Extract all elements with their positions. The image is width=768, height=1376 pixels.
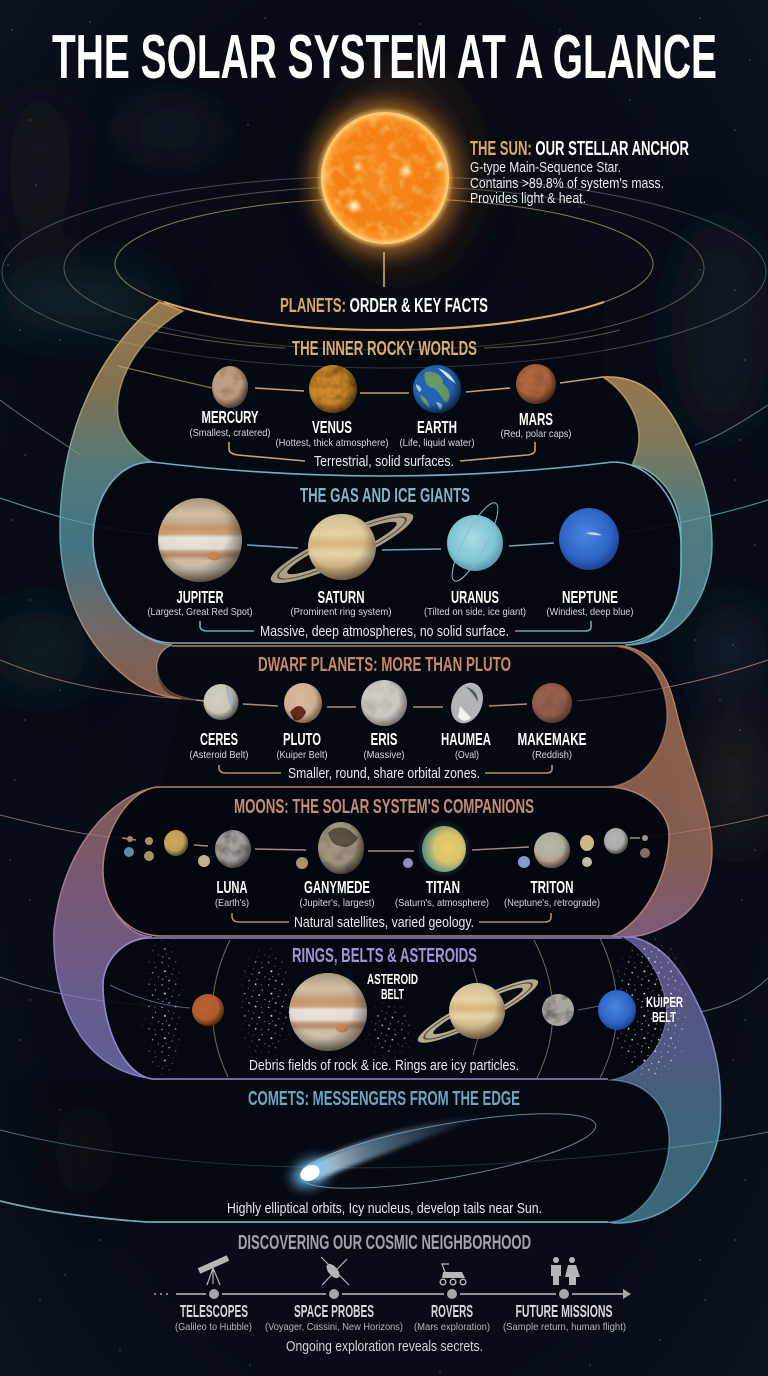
label: saturn: (Prominent ring system)	[290, 606, 392, 618]
planet: mercury	[212, 366, 248, 408]
planet: neptune	[559, 508, 619, 570]
label: mercury: MERCURY	[202, 407, 259, 427]
label: neptune: (Windiest, deep blue)	[546, 606, 634, 618]
label: kuiper belt: BELT	[652, 1009, 676, 1026]
label: haumea	[441, 729, 491, 761]
planet: mars	[192, 994, 224, 1026]
caption: moons: Natural satellites, varied geology.	[294, 915, 474, 931]
label: titan: (Saturn's, atmosphere)	[395, 897, 489, 909]
label: uranus	[424, 587, 526, 618]
caption: comets: Highly elliptical orbits, Icy nucleus, develop tails near Sun.	[227, 1201, 542, 1217]
sun stem	[383, 252, 385, 287]
label: space probes	[265, 1301, 403, 1333]
caption: rocky worlds: Terrestrial, solid surfaces.	[314, 454, 454, 470]
planet: jupiter	[289, 973, 367, 1051]
label: ganymede: (Jupiter's, largest)	[300, 897, 374, 909]
sun disc	[321, 112, 449, 244]
comet	[287, 1115, 490, 1193]
label: luna: (Earth's)	[215, 897, 249, 909]
label: uranus: (Tilted on side, ice giant)	[424, 606, 526, 618]
label: earth: EARTH	[417, 417, 457, 437]
label: venus: (Hottest, thick atmosphere)	[276, 437, 388, 449]
planet: pluto	[284, 683, 322, 723]
label: pluto	[276, 729, 328, 761]
label: makemake: (Reddish)	[532, 749, 572, 761]
label: triton	[504, 877, 600, 909]
heading: inner rocky worlds: THE INNER ROCKY WORLDS	[292, 337, 477, 360]
heading: comets: COMETS: MESSENGERS FROM THE EDGE	[248, 1087, 520, 1110]
label: titan: TITAN	[426, 877, 460, 897]
sun facts: Contains >89.8% of system's mass.	[470, 176, 664, 192]
icon: astronauts	[551, 1257, 580, 1285]
label: ceres: (Asteroid Belt)	[190, 749, 248, 761]
label: asteroid belt	[367, 971, 418, 1003]
sun facts	[470, 160, 664, 207]
label: eris	[364, 729, 404, 761]
planet: makemake	[532, 683, 572, 723]
label: asteroid belt: BELT	[381, 986, 404, 1003]
caption: gas giants: Massive, deep atmospheres, no solid surface.	[260, 624, 509, 640]
planet: venus	[309, 365, 357, 413]
heading: rings: RINGS, BELTS & ASTEROIDS	[292, 944, 477, 967]
planet: mars	[516, 364, 556, 404]
label: earth	[400, 417, 474, 449]
label: jupiter: JUPITER	[176, 587, 224, 607]
panel background	[117, 302, 639, 476]
moon: luna	[215, 830, 251, 868]
panel: inner rocky worlds	[117, 294, 639, 476]
label: future missions	[503, 1301, 626, 1333]
heading: planets order: PLANETS: ORDER & KEY FACTS	[280, 294, 488, 317]
label: pluto: (Kuiper Belt)	[276, 749, 328, 761]
asteroid and kuiper debris	[142, 934, 692, 1086]
moon: titan	[419, 823, 469, 875]
panel background	[103, 937, 666, 1080]
label: rovers	[414, 1301, 490, 1333]
panel: comets	[0, 1080, 669, 1222]
ribbon: planets to gas giants to dwarf planets	[60, 302, 196, 700]
label: rovers: ROVERS	[431, 1301, 473, 1321]
label: telescopes: TELESCOPES	[180, 1301, 248, 1321]
label: eris: ERIS	[370, 729, 398, 749]
label: mercury: (Smallest, cratered)	[190, 427, 270, 439]
panel: dwarf planets	[157, 646, 667, 787]
planet: eris	[361, 680, 407, 726]
panel: discovering our cosmic neighborhood	[154, 1231, 631, 1355]
panel: the sun	[311, 102, 689, 287]
caption: dwarf planets: Smaller, round, share orbital zones.	[288, 766, 480, 782]
label: earth: (Life, liquid water)	[400, 437, 474, 449]
sun facts: Provides light & heat.	[470, 191, 586, 207]
ribbon: dwarf planets to moons	[608, 646, 712, 937]
label: space probes: (Voyager, Cassini, New Horizons)	[265, 1321, 403, 1333]
label: ganymede: GANYMEDE	[304, 877, 370, 897]
moon: triton	[534, 832, 570, 868]
label: uranus: URANUS	[451, 587, 499, 607]
label: mars	[500, 409, 572, 440]
label: space probes: SPACE PROBES	[294, 1301, 374, 1321]
label: luna: LUNA	[216, 877, 248, 897]
label: ganymede	[300, 877, 374, 909]
planet: saturn	[265, 502, 419, 594]
panel background	[0, 1080, 669, 1222]
label: eris: (Massive)	[364, 749, 404, 761]
heading: gas and ice giants: THE GAS AND ICE GIANTS	[300, 484, 470, 507]
label: neptune	[546, 587, 634, 618]
heading: dwarf planets: DWARF PLANETS: MORE THAN PLUTO	[258, 653, 511, 676]
planet: neptune	[598, 990, 636, 1030]
label: haumea: HAUMEA	[441, 729, 491, 749]
label: mars: MARS	[519, 409, 553, 429]
label: triton: (Neptune's, retrograde)	[504, 897, 600, 909]
label: venus	[276, 417, 388, 449]
panel: rings belts and asteroids	[102, 934, 692, 1086]
label: haumea: (Oval)	[455, 749, 479, 761]
sun facts: G-type Main-Sequence Star.	[470, 160, 621, 176]
moon: ganymede	[318, 822, 364, 874]
icon: telescope	[199, 1258, 228, 1285]
panel background	[157, 647, 667, 787]
ribbon: moons to rings	[54, 787, 160, 1079]
label: jupiter: (Largest, Great Red Spot)	[148, 606, 252, 618]
label: rovers: (Mars exploration)	[414, 1321, 490, 1333]
label: telescopes: (Galileo to Hubble)	[175, 1321, 252, 1333]
planet: uranus	[445, 498, 505, 586]
label: neptune: NEPTUNE	[562, 587, 618, 607]
label: ceres	[190, 729, 248, 761]
sun glow	[311, 102, 459, 254]
label: makemake	[518, 729, 586, 761]
orbit rings	[0, 176, 768, 1168]
planet: jupiter	[158, 498, 242, 582]
label: titan	[395, 877, 489, 909]
heading: discovering: DISCOVERING OUR COSMIC NEIGHBORHOOD	[238, 1231, 531, 1254]
panel: gas and ice giants	[93, 462, 681, 643]
caption: exploration: Ongoing exploration reveals secrets.	[286, 1339, 483, 1355]
label: telescopes	[175, 1301, 252, 1333]
label: mercury	[190, 407, 270, 439]
planet: saturn	[413, 970, 543, 1052]
label: makemake: MAKEMAKE	[518, 729, 586, 749]
label: mars: (Red, polar caps)	[500, 428, 572, 440]
label: triton: TRITON	[530, 877, 574, 897]
label: asteroid belt: ASTEROID	[367, 971, 418, 988]
panel background	[103, 787, 669, 936]
comet orbit	[296, 1098, 600, 1204]
icon: rover	[440, 1264, 466, 1285]
small moons	[124, 828, 650, 869]
label: saturn: SATURN	[318, 587, 364, 607]
label: future missions: FUTURE MISSIONS	[516, 1301, 612, 1321]
planet: haumea	[445, 678, 489, 728]
label: kuiper belt	[646, 994, 683, 1026]
ribbon: rocky worlds to gas giants	[603, 377, 712, 645]
icon: space probe	[321, 1257, 349, 1285]
label: luna	[215, 877, 249, 909]
label: saturn	[290, 587, 392, 618]
heading: moons: MOONS: THE SOLAR SYSTEM'S COMPANIONS	[234, 795, 534, 818]
label: pluto: PLUTO	[283, 729, 321, 749]
timeline arrow	[154, 1289, 631, 1299]
ribbon: rings to comets	[608, 937, 721, 1223]
caption: rings: Debris fields of rock & ice. Rings are icy particles.	[249, 1058, 519, 1074]
label: kuiper belt: KUIPER	[646, 994, 683, 1011]
label: venus: VENUS	[312, 417, 352, 437]
planet: mercury	[542, 994, 574, 1026]
panel: moons	[103, 787, 669, 936]
planet: ceres	[204, 684, 238, 720]
planet: earth	[413, 365, 461, 413]
label: jupiter	[148, 587, 252, 618]
panel background	[93, 462, 681, 643]
label: future missions: (Sample return, human flight)	[503, 1321, 626, 1333]
label: ceres: CERES	[200, 729, 238, 749]
